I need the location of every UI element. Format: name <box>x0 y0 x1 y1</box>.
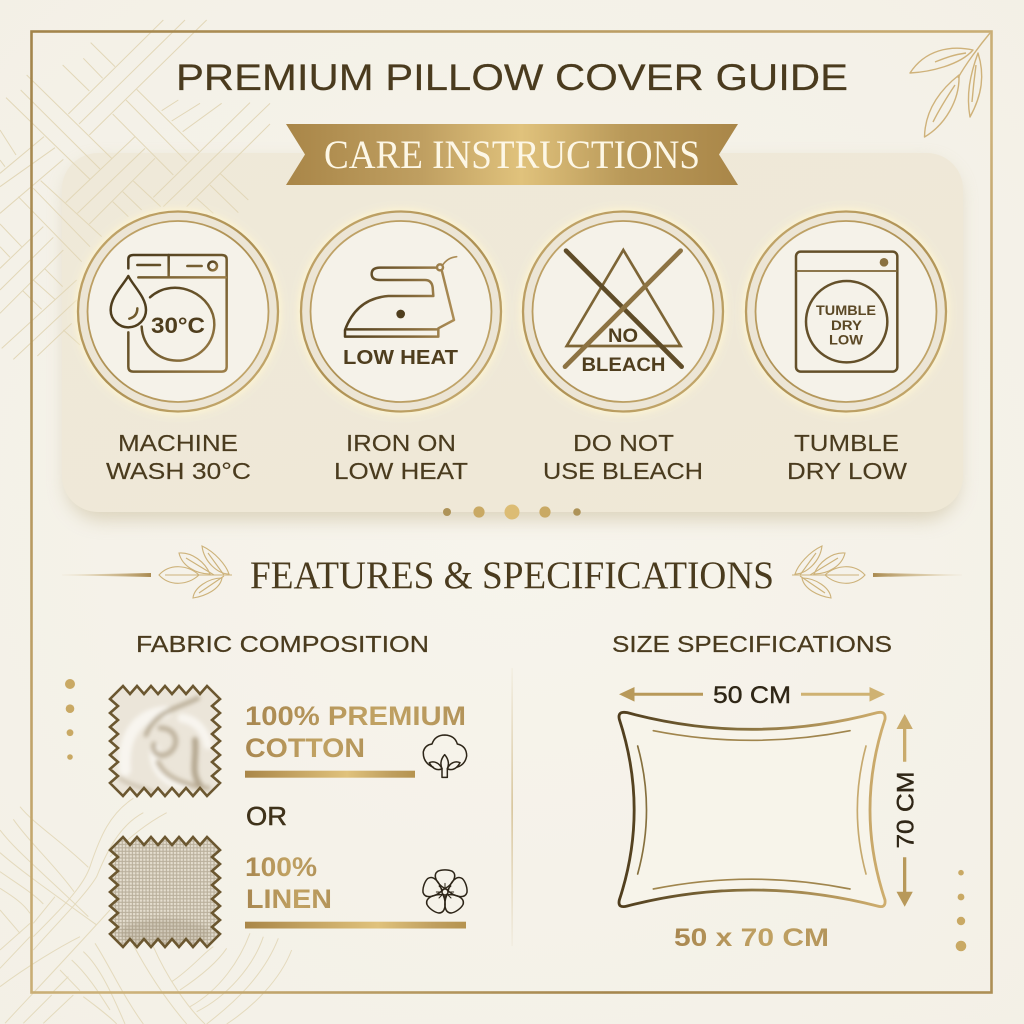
pattern: curved weave lines bottom left <box>0 798 292 1024</box>
care item: no bleach <box>520 208 726 414</box>
label: tumble dry: DRY LOW <box>787 458 908 484</box>
icon: corner leaves <box>910 33 990 137</box>
section ornament: right <box>792 546 962 598</box>
icon: iron <box>345 257 457 337</box>
text: size summary: 50 x 70 CM <box>674 924 829 952</box>
care item: tumble dry: TUMBLE <box>816 303 876 318</box>
pattern: straight weave lines top left <box>0 20 270 359</box>
care item: tumble dry: DRY <box>831 318 862 333</box>
text: or: OR <box>246 801 287 831</box>
dimension: width arrow <box>619 682 885 709</box>
banner: care instructions: CARE INSTRUCTIONS <box>324 132 700 177</box>
icon: cotton boll <box>423 735 467 777</box>
pagination dots <box>443 504 581 520</box>
care item: iron <box>298 208 504 414</box>
care item: no bleach: BLEACH <box>582 355 666 376</box>
icon: crossed triangle <box>565 250 682 367</box>
care item: machine wash <box>75 208 281 414</box>
panel: care instructions <box>62 153 963 520</box>
pillow diagram <box>619 712 885 907</box>
care item: iron: LOW HEAT <box>343 347 458 369</box>
label: tumble dry: TUMBLE <box>794 430 899 456</box>
care item: tumble dry <box>743 208 949 414</box>
text: linen: 100% <box>245 852 317 882</box>
label: machine wash: MACHINE <box>118 430 238 456</box>
care item: machine wash: 30°C <box>151 313 205 338</box>
text: cotton <box>245 701 466 778</box>
icon: washing machine <box>111 255 227 372</box>
label: iron <box>334 430 468 484</box>
text: linen <box>245 852 466 928</box>
title: PREMIUM PILLOW COVER GUIDE <box>176 56 848 98</box>
heading: size specifications: SIZE SPECIFICATIONS <box>612 631 892 657</box>
dimension: width arrow: 50 CM <box>713 682 791 709</box>
icon: linen flower <box>421 870 469 916</box>
icon: dryer <box>796 252 897 372</box>
label: iron: IRON ON <box>346 430 456 456</box>
care item: no bleach: NO <box>608 326 638 347</box>
label: no bleach <box>543 430 703 484</box>
text: linen: LINEN <box>246 884 332 914</box>
decorative dots right <box>956 870 966 951</box>
label: machine wash <box>106 430 251 484</box>
column divider <box>512 668 513 946</box>
text: cotton: COTTON <box>245 733 365 763</box>
dimension: height arrow: 70 CM <box>892 772 920 848</box>
section ornament: left <box>62 546 232 598</box>
label: no bleach: DO NOT <box>573 430 674 456</box>
decorative dots left <box>65 679 75 760</box>
swatch: linen <box>105 831 225 951</box>
banner: care instructions <box>286 124 738 185</box>
text: cotton: 100% PREMIUM <box>245 701 466 731</box>
label: iron: LOW HEAT <box>334 458 468 484</box>
section heading: FEATURES & SPECIFICATIONS <box>250 553 774 597</box>
label: no bleach: USE BLEACH <box>543 458 703 484</box>
heading: fabric composition: FABRIC COMPOSITION <box>136 631 429 657</box>
dimension: height arrow <box>892 714 920 907</box>
swatch: cotton <box>105 680 225 800</box>
label: machine wash: WASH 30°C <box>106 458 251 484</box>
label: tumble dry <box>787 430 908 484</box>
care item: tumble dry: LOW <box>829 332 863 348</box>
